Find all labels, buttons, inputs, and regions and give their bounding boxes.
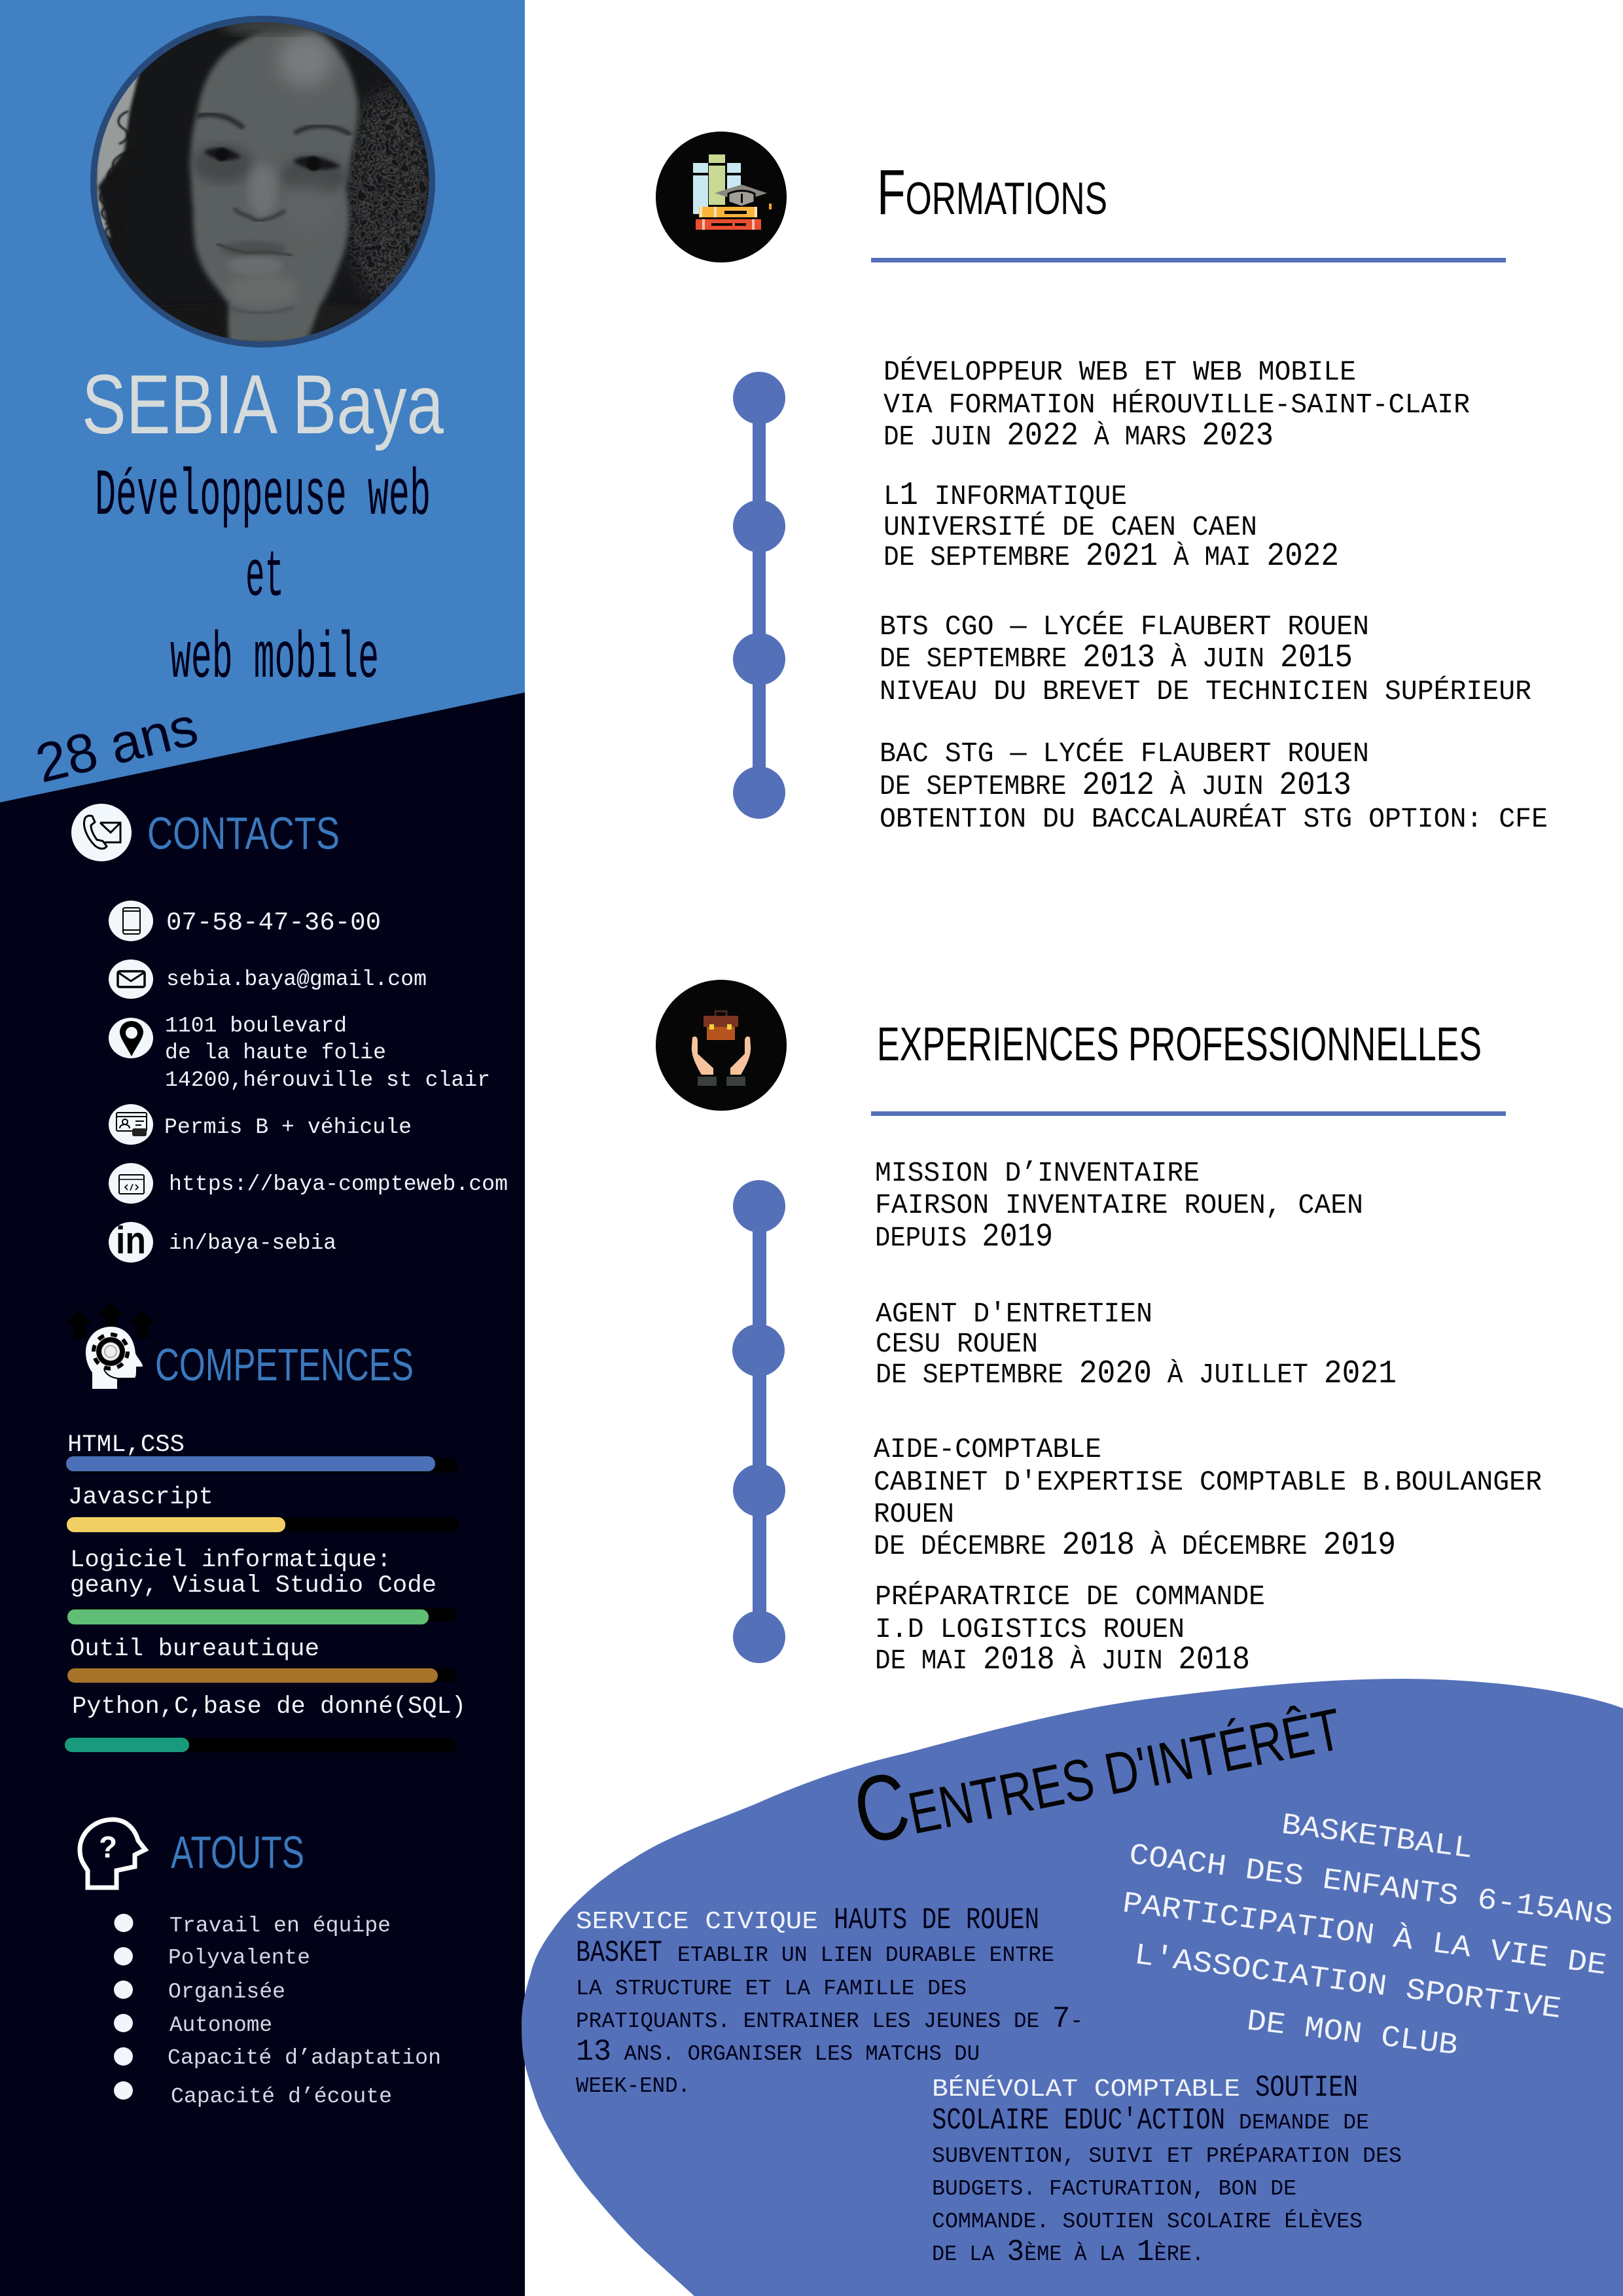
heading: competences: COMPETENCES: [155, 1339, 414, 1390]
timeline: experiences: [732, 1180, 785, 1663]
rotated text: basketball: COACH DES ENFANTS 6-15ANS: [1127, 1838, 1615, 1934]
entry: preparatrice de commande: DE MAI 2018 À JUIN 2018: [875, 1641, 1250, 1679]
text block: service civique: HAUTS DE ROUEN: [834, 1903, 1039, 1937]
rotated text: basketball: DE MON CLUB: [1245, 2004, 1459, 2063]
icon: head with question mark: [80, 1820, 145, 1888]
entry: developpeur web: VIA FORMATION HÉROUVILLE-SAINT-CLAIR: [883, 389, 1470, 421]
job title: et: [245, 541, 284, 615]
entry: agent d entretien: [876, 1298, 1397, 1393]
panel: centres d interet: [522, 1666, 1623, 2296]
panel: sidebar blue header: [0, 0, 525, 802]
contact: driving licence: Permis B + véhicule: [164, 1115, 412, 1139]
contact: email: [109, 960, 427, 999]
contact: driving licence: [109, 1104, 412, 1145]
contact: address: de la haute folie: [165, 1041, 386, 1065]
icon: books and graduation cap: [656, 132, 787, 262]
entry: l1 informatique: L1 INFORMATIQUE: [883, 477, 1127, 514]
divider rule: [871, 1111, 1506, 1116]
skill: python c sql: Python,C,base de donné(SQL): [72, 1693, 466, 1721]
contact: linkedin: in/baya-sebia: [169, 1231, 336, 1255]
text block: service civique: WEEK-END.: [576, 2074, 690, 2098]
panel: sidebar dark background: [0, 655, 525, 2296]
entry: aide comptable: ROUEN: [874, 1498, 954, 1530]
job title: [95, 460, 431, 697]
contact: phone: 07-58-47-36-00: [166, 908, 381, 937]
rotated text: basketball: L'ASSOCIATION SPORTIVE: [1132, 1938, 1563, 2026]
skill: software: Logiciel informatique:: [70, 1547, 391, 1574]
text block: benevolat comptable: DEMANDE DE: [1239, 2111, 1369, 2135]
text block: benevolat comptable: SOUTIEN: [1255, 2071, 1358, 2105]
text block: benevolat comptable: [932, 2071, 1402, 2269]
entry: bac stg: [880, 738, 1548, 835]
entry: developpeur web: [883, 356, 1470, 455]
list item: autonome: [114, 2013, 272, 2037]
icon: phone and envelope: [71, 804, 132, 861]
entry: aide comptable: AIDE-COMPTABLE: [874, 1433, 1101, 1465]
entry: l1 informatique: DE SEPTEMBRE 2021 À MAI 2022: [883, 538, 1339, 575]
list item: organisee: [114, 1980, 285, 2004]
entry: agent d entretien: CESU ROUEN: [876, 1328, 1038, 1360]
list item: capacite d adaptation: Capacité d’adaptation: [168, 2046, 441, 2070]
text block: service civique: PRATIQUANTS. ENTRAINER LES JEUNES DE 7-: [576, 2002, 1083, 2036]
list item: capacite d ecoute: Capacité d’écoute: [171, 2085, 392, 2109]
panel: competences: [65, 1302, 466, 1752]
profile photo: [90, 16, 435, 350]
entry: bts cgo: [880, 611, 1531, 708]
contact: phone: [109, 901, 381, 941]
text block: service civique: BASKET: [576, 1936, 662, 1970]
entry: aide comptable: [874, 1433, 1542, 1564]
timeline: formations: [733, 372, 785, 819]
icon: head with gear: [67, 1302, 155, 1389]
heading: atouts: ATOUTS: [171, 1827, 304, 1878]
entry: mission d inventaire: [875, 1157, 1363, 1256]
entry: aide comptable: CABINET D'EXPERTISE COMPTABLE B.BOULANGER: [874, 1466, 1542, 1498]
blue blob background: [522, 1679, 1623, 2296]
panel: contacts: [71, 804, 508, 1263]
contact: linkedin: [109, 1219, 336, 1263]
skill: software: [67, 1547, 456, 1624]
text block: service civique: LA STRUCTURE ET LA FAMILLE DES: [576, 1977, 967, 2001]
age: 28 ans: [30, 695, 204, 794]
rotated text: basketball: BASKETBALL: [1279, 1808, 1474, 1867]
entry: developpeur web: DÉVELOPPEUR WEB ET WEB MOBILE: [883, 356, 1356, 388]
panel: atouts: [80, 1820, 441, 2109]
entry: bts cgo: DE SEPTEMBRE 2013 À JUIN 2015: [880, 639, 1353, 677]
heading: centres d interet: CENTRES D'INTÉRÊT: [846, 1666, 1348, 1864]
entry: bts cgo: NIVEAU DU BREVET DE TECHNICIEN SUPÉRIEUR: [880, 675, 1531, 708]
list item: capacite d ecoute: [114, 2081, 392, 2109]
skill: software: geany, Visual Studio Code: [70, 1572, 437, 1600]
entry: mission d inventaire: DEPUIS 2019: [875, 1219, 1053, 1256]
icon: head with question mark: ?: [99, 1830, 117, 1864]
list item: autonome: Autonome: [169, 2013, 272, 2037]
contact: address: 14200,hérouville st clair: [165, 1068, 490, 1092]
entry: l1 informatique: [883, 477, 1339, 575]
entry: preparatrice de commande: PRÉPARATRICE DE COMMANDE: [875, 1581, 1265, 1613]
entry: bts cgo: BTS CGO — LYCÉE FLAUBERT ROUEN: [880, 611, 1369, 643]
entry: agent d entretien: AGENT D'ENTRETIEN: [876, 1298, 1152, 1330]
job title: web mobile: [170, 623, 379, 697]
entry: aide comptable: DE DÉCEMBRE 2018 À DÉCEMBRE 2019: [874, 1527, 1396, 1564]
name: SEBIA Baya: [82, 358, 444, 452]
panel: formations: [656, 132, 1548, 835]
skill: office tools: Outil bureautique: [70, 1636, 319, 1663]
list item: travail en equipe: Travail en équipe: [169, 1914, 391, 1938]
text block: benevolat comptable: COMMANDE. SOUTIEN SCOLAIRE ÉLÈVES: [932, 2209, 1363, 2234]
contact: linkedin: in: [116, 1219, 146, 1262]
list item: organisee: Organisée: [168, 1980, 285, 2004]
text block: benevolat comptable: DE LA 3ÈME À LA 1ÈRE.: [932, 2235, 1204, 2269]
contact: address: 1101 boulevard: [165, 1014, 347, 1038]
text block: service civique: ETABLIR UN LIEN DURABLE ENTRE: [677, 1943, 1054, 1967]
text block: benevolat comptable: BUDGETS. FACTURATION, BON DE: [932, 2177, 1296, 2201]
contact: email: sebia.baya@gmail.com: [166, 967, 427, 992]
entry: bac stg: BAC STG — LYCÉE FLAUBERT ROUEN: [880, 738, 1369, 770]
list item: polyvalente: Polyvalente: [168, 1946, 310, 1970]
entry: preparatrice de commande: [875, 1581, 1265, 1679]
entry: mission d inventaire: MISSION D’INVENTAIRE: [875, 1157, 1200, 1189]
heading: contacts: CONTACTS: [147, 808, 340, 859]
job title: Développeuse web: [95, 460, 431, 534]
skill: html css: [66, 1431, 458, 1473]
entry: preparatrice de commande: I.D LOGISTICS ROUEN: [875, 1613, 1185, 1645]
entry: l1 informatique: UNIVERSITÉ DE CAEN CAEN: [883, 511, 1257, 543]
entry: bac stg: DE SEPTEMBRE 2012 À JUIN 2013: [880, 767, 1351, 804]
contact: website: https://baya-compteweb.com: [169, 1172, 508, 1196]
icon: hands holding briefcase: [656, 980, 787, 1111]
text block: benevolat comptable: SUBVENTION, SUIVI ET PRÉPARATION DES: [932, 2144, 1402, 2168]
heading: formations: FORMATIONS: [877, 156, 1107, 228]
skill: javascript: Javascript: [68, 1484, 213, 1511]
text block: service civique: [576, 1903, 1083, 2098]
entry: mission d inventaire: FAIRSON INVENTAIRE ROUEN, CAEN: [875, 1189, 1363, 1221]
text block: service civique: SERVICE CIVIQUE: [576, 1908, 818, 1936]
contact: address: [109, 1014, 490, 1092]
text block: service civique: 13 ANS. ORGANISER LES MATCHS DU: [576, 2035, 980, 2069]
text block: benevolat comptable: BÉNÉVOLAT COMPTABLE: [932, 2074, 1240, 2104]
panel: experiences: [656, 980, 1542, 1679]
entry: agent d entretien: DE SEPTEMBRE 2020 À JUILLET 2021: [876, 1355, 1397, 1393]
skill: office tools: [67, 1636, 456, 1683]
entry: developpeur web: DE JUIN 2022 À MARS 2023: [883, 418, 1274, 455]
skill: python c sql: [65, 1693, 466, 1752]
contact: website: [109, 1163, 508, 1204]
text block: benevolat comptable: SCOLAIRE EDUC'ACTION: [932, 2104, 1225, 2138]
rotated text: basketball: [1120, 1808, 1615, 2063]
skill: javascript: [67, 1484, 458, 1532]
divider rule: [871, 258, 1506, 262]
rotated text: basketball: PARTICIPATION À LA VIE DE: [1120, 1886, 1609, 1983]
skill: html css: HTML,CSS: [67, 1431, 185, 1459]
entry: bac stg: OBTENTION DU BACCALAURÉAT STG OPTION: CFE: [880, 803, 1548, 835]
